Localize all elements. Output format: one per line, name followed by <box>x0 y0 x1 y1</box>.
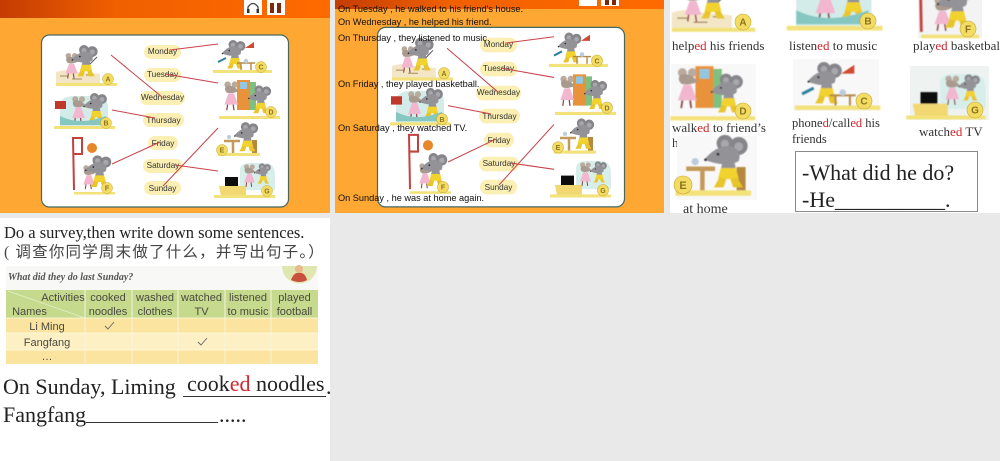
picture C: phoned or called his friends <box>792 59 880 146</box>
activity card: Tuesday <box>147 70 179 79</box>
survey table: played <box>278 292 311 304</box>
instructions: ( 调查你同学周末做了什么，并写出句子。） <box>4 243 325 261</box>
activity card: Saturday <box>483 158 516 168</box>
question box <box>796 152 978 212</box>
picture A: helped his friends: helped his friends <box>672 38 764 53</box>
overlaid sentences: On Tuesday , he walked to his friend's house. <box>338 4 523 14</box>
answer sentences: ..... <box>219 402 246 427</box>
survey table: washed <box>135 292 174 304</box>
picture B: listened to music: B <box>864 16 872 28</box>
answer sentences: On Sunday, Liming <box>3 374 176 399</box>
picture D: walked to friend's house: house <box>672 135 703 150</box>
survey table: … <box>42 351 52 363</box>
activity card: F <box>441 184 446 192</box>
picture E: at home <box>674 135 757 217</box>
survey table: clothes <box>138 306 173 318</box>
bottom background <box>330 213 1000 461</box>
picture G: watched TV: G <box>971 106 979 116</box>
answer sentences: cooked noodles <box>187 371 324 396</box>
picture F: played basketball: F <box>965 24 971 36</box>
picture C: phoned or called his friends: friends <box>792 132 827 146</box>
activity card: G <box>600 187 606 195</box>
activity card: D <box>268 110 274 116</box>
activity card: C <box>594 57 600 65</box>
activity card: Wednesday <box>141 93 185 102</box>
panel: past tense vocabulary <box>670 0 1000 217</box>
survey table: TV <box>194 306 209 318</box>
survey table: cooked <box>90 292 126 304</box>
overlaid sentences <box>338 4 523 203</box>
question box: -What did he do? <box>802 160 954 185</box>
overlaid sentences: On Wednesday , he helped his friend. <box>338 17 492 27</box>
picture A: helped his friends: A <box>739 18 747 28</box>
activity card: G <box>264 188 270 196</box>
instructions <box>4 223 325 261</box>
activity card: B <box>439 116 445 124</box>
activity card: E <box>220 148 225 154</box>
activity card: Tuesday <box>483 63 515 73</box>
question box: -He__________. <box>802 187 950 212</box>
overlaid sentences: On Thursday , they listened to music. <box>338 33 490 43</box>
panel: matching activity <box>0 0 330 213</box>
picture C: phoned or called his friends: phoned/called his <box>792 116 880 130</box>
overlaid sentences: On Friday , they played basketball. <box>338 79 479 89</box>
survey table image: What did they do last Sunday? <box>8 272 133 283</box>
survey table: watched <box>180 292 222 304</box>
picture G: watched TV: watched TV <box>919 124 983 139</box>
activity card: Thursday <box>146 116 181 125</box>
answer sentences <box>3 371 332 427</box>
icon: pause cropped <box>601 0 619 6</box>
survey table <box>6 290 318 364</box>
activity card: A <box>105 76 111 84</box>
panel: survey exercise <box>0 218 332 461</box>
illustration medallion <box>282 265 317 284</box>
activity card: Wednesday <box>477 87 521 97</box>
activity card: Friday <box>152 139 175 148</box>
panel: matching activity with sentences <box>335 0 664 213</box>
survey table: to music <box>228 306 269 318</box>
survey table: noodles <box>89 306 128 318</box>
activity card: Friday <box>488 135 511 145</box>
activity card: A <box>441 70 447 78</box>
answer sentences: . <box>326 374 332 399</box>
activity card: Thursday <box>482 111 517 121</box>
activity card: D <box>604 104 610 112</box>
activity card: E <box>556 144 561 152</box>
activity card <box>42 35 288 207</box>
instructions: Do a survey,then write down some sentences. <box>4 223 304 242</box>
icon: pause <box>267 0 285 15</box>
activity card: Monday <box>484 39 514 49</box>
overlaid sentences: On Sunday , he was at home again. <box>338 193 484 203</box>
header bar <box>335 0 664 9</box>
activity card: Monday <box>148 47 178 56</box>
activity card: F <box>105 186 110 192</box>
picture G: watched TV <box>906 66 989 139</box>
activity card: Sunday <box>485 182 513 192</box>
picture B: listened to music: listened to music <box>789 38 877 53</box>
header bar <box>0 0 330 18</box>
icon: headphones cropped <box>579 0 597 6</box>
survey table: football <box>277 306 312 318</box>
activity card: B <box>103 120 109 128</box>
survey table: listened <box>229 292 267 304</box>
survey table: Activities <box>41 292 85 304</box>
picture D: walked to friend's house <box>670 64 766 150</box>
picture E: at home: E <box>679 180 687 192</box>
overlaid sentences: On Saturday , they watched TV. <box>338 123 467 133</box>
picture F: played basketball <box>913 0 1000 53</box>
picture D: walked to friend's house: walked to friend’s <box>672 120 766 135</box>
activity card: C <box>258 64 264 72</box>
survey table: Li Ming <box>29 321 65 333</box>
icon: headphones <box>244 0 262 15</box>
answer sentences: Fangfang <box>3 402 86 427</box>
survey table image <box>6 265 318 364</box>
picture B: listened to music <box>787 0 883 53</box>
picture E: at home: at home <box>683 202 728 217</box>
activity card: Saturday <box>147 161 180 170</box>
picture A: helped his friends <box>672 0 764 53</box>
activity card <box>378 27 624 207</box>
picture D: walked to friend's house: D <box>739 106 747 118</box>
survey table: Fangfang <box>24 337 70 349</box>
picture C: phoned or called his friends: C <box>860 96 868 108</box>
activity card: Sunday <box>149 184 177 193</box>
survey table: Names <box>12 306 47 318</box>
